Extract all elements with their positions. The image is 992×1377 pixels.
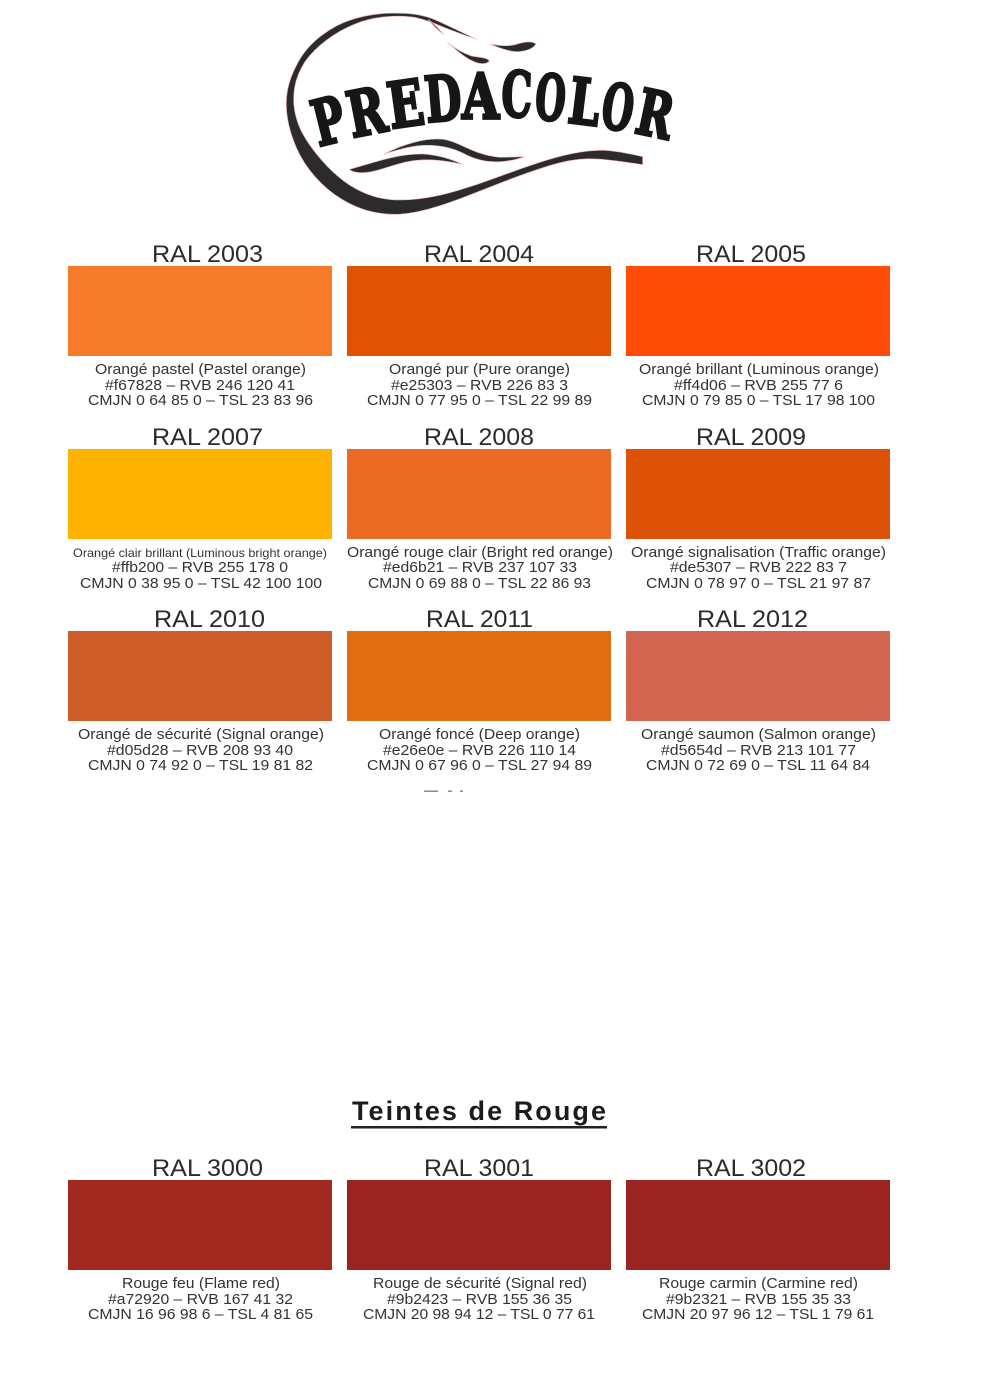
- card: RAL 2012: #d5654d – RVB 213 101 77: [661, 742, 856, 759]
- logo wordmark: E: [383, 66, 429, 144]
- logo wordmark: L: [565, 64, 605, 141]
- card: RAL 2003: CMJN 0 64 85 0 – TSL 23 83 96: [88, 392, 313, 409]
- card: RAL 3001: RAL 3001: [424, 1155, 534, 1182]
- card: RAL 2010: RAL 2010: [154, 606, 265, 633]
- card: RAL 2008: [347, 424, 613, 592]
- card: RAL 3000: Rouge feu (Flame red): [122, 1275, 280, 1292]
- cropped heading fragment: [424, 790, 463, 792]
- card: RAL 3001: Rouge de sécurité (Signal red): [373, 1275, 587, 1292]
- card: RAL 2009: Orangé signalisation (Traffic orange): [631, 544, 886, 561]
- card: RAL 2009: #de5307 – RVB 222 83 7: [670, 559, 847, 576]
- card: RAL 2011: RAL 2011: [426, 606, 533, 633]
- card: RAL 2012: Orangé saumon (Salmon orange): [641, 726, 876, 743]
- card: RAL 2008: Orangé rouge clair (Bright red orange): [347, 544, 613, 561]
- card: RAL 2010: #d05d28 – RVB 208 93 40: [107, 742, 293, 759]
- section heading: Teintes de Rouge: Teintes de Rouge: [352, 1096, 606, 1126]
- card: RAL 2003: #f67828 – RVB 246 120 41: [105, 377, 295, 394]
- logo wordmark: C: [500, 58, 533, 133]
- card: RAL 3002: CMJN 20 97 96 12 – TSL 1 79 61: [642, 1306, 874, 1323]
- card: RAL 3001: CMJN 20 98 94 12 – TSL 0 77 61: [363, 1306, 595, 1323]
- logo swoosh: [286, 13, 643, 214]
- card: RAL 2005: RAL 2005: [696, 241, 806, 268]
- card: RAL 2005: [626, 241, 890, 409]
- card: RAL 2012: RAL 2012: [697, 606, 808, 633]
- card: RAL 3001: #9b2423 – RVB 155 36 35: [387, 1291, 572, 1308]
- card: RAL 2011: #e26e0e – RVB 226 110 14: [383, 742, 576, 759]
- card: RAL 2010: CMJN 0 74 92 0 – TSL 19 81 82: [88, 757, 313, 774]
- logo wordmark: R: [341, 72, 393, 152]
- card: RAL 2007: RAL 2007: [152, 424, 263, 451]
- card: RAL 2005: Orangé brillant (Luminous orange): [639, 361, 879, 378]
- logo wordmark: A: [461, 60, 501, 134]
- logo wordmark: P: [304, 82, 353, 161]
- card: RAL 2004: #e25303 – RVB 226 83 3: [391, 377, 568, 394]
- logo wordmark: O: [597, 70, 639, 148]
- card: RAL 2012: [626, 606, 890, 774]
- card: RAL 2011: Orangé foncé (Deep orange): [379, 726, 580, 743]
- logo wordmark: R: [630, 74, 681, 155]
- card: RAL 2003: Orangé pastel (Pastel orange): [95, 361, 306, 378]
- card: RAL 2007: [68, 424, 332, 592]
- card: RAL 2007: Orangé clair brillant (Luminous bright orange): [73, 546, 327, 560]
- card: RAL 2004: Orangé pur (Pure orange): [389, 361, 570, 378]
- card: RAL 2003: RAL 2003: [152, 241, 263, 268]
- logo wordmark: O: [532, 61, 569, 137]
- card: RAL 2008: #ed6b21 – RVB 237 107 33: [383, 559, 577, 576]
- card: RAL 2004: RAL 2004: [424, 241, 534, 268]
- logo: Predacolor: [286, 13, 681, 214]
- card: RAL 3000: #a72920 – RVB 167 41 32: [108, 1291, 293, 1308]
- logo wordmark: D: [422, 60, 464, 137]
- card: RAL 2007: #ffb200 – RVB 255 178 0: [112, 559, 288, 576]
- card: RAL 2005: #ff4d06 – RVB 255 77 6: [674, 377, 843, 394]
- card: RAL 3001: [347, 1155, 611, 1323]
- card: RAL 2010: [68, 606, 332, 774]
- card: RAL 2004: [347, 241, 611, 409]
- card: RAL 2007: CMJN 0 38 95 0 – TSL 42 100 100: [80, 575, 322, 592]
- card: RAL 3002: #9b2321 – RVB 155 35 33: [666, 1291, 851, 1308]
- card: RAL 2004: CMJN 0 77 95 0 – TSL 22 99 89: [367, 392, 592, 409]
- card: RAL 2008: RAL 2008: [424, 424, 534, 451]
- card: RAL 2009: [626, 424, 890, 592]
- card: RAL 3002: Rouge carmin (Carmine red): [659, 1275, 858, 1292]
- card: RAL 2008: CMJN 0 69 88 0 – TSL 22 86 93: [368, 575, 591, 592]
- card: RAL 2005: CMJN 0 79 85 0 – TSL 17 98 100: [642, 392, 875, 409]
- card: RAL 2010: Orangé de sécurité (Signal orange): [78, 726, 324, 743]
- card: RAL 2003: [68, 241, 332, 409]
- card: RAL 3000: [68, 1155, 332, 1323]
- card: RAL 2009: CMJN 0 78 97 0 – TSL 21 97 87: [646, 575, 871, 592]
- card: RAL 2012: CMJN 0 72 69 0 – TSL 11 64 84: [646, 757, 870, 774]
- card: RAL 3000: CMJN 16 96 98 6 – TSL 4 81 65: [88, 1306, 313, 1323]
- logo wordmark: [304, 58, 681, 161]
- card: RAL 3002: [626, 1155, 890, 1323]
- card: RAL 3000: RAL 3000: [152, 1155, 263, 1182]
- card: RAL 3002: RAL 3002: [696, 1155, 806, 1182]
- card: RAL 2011: [347, 606, 611, 774]
- card: RAL 2009: RAL 2009: [696, 424, 806, 451]
- card: RAL 2011: CMJN 0 67 96 0 – TSL 27 94 89: [367, 757, 592, 774]
